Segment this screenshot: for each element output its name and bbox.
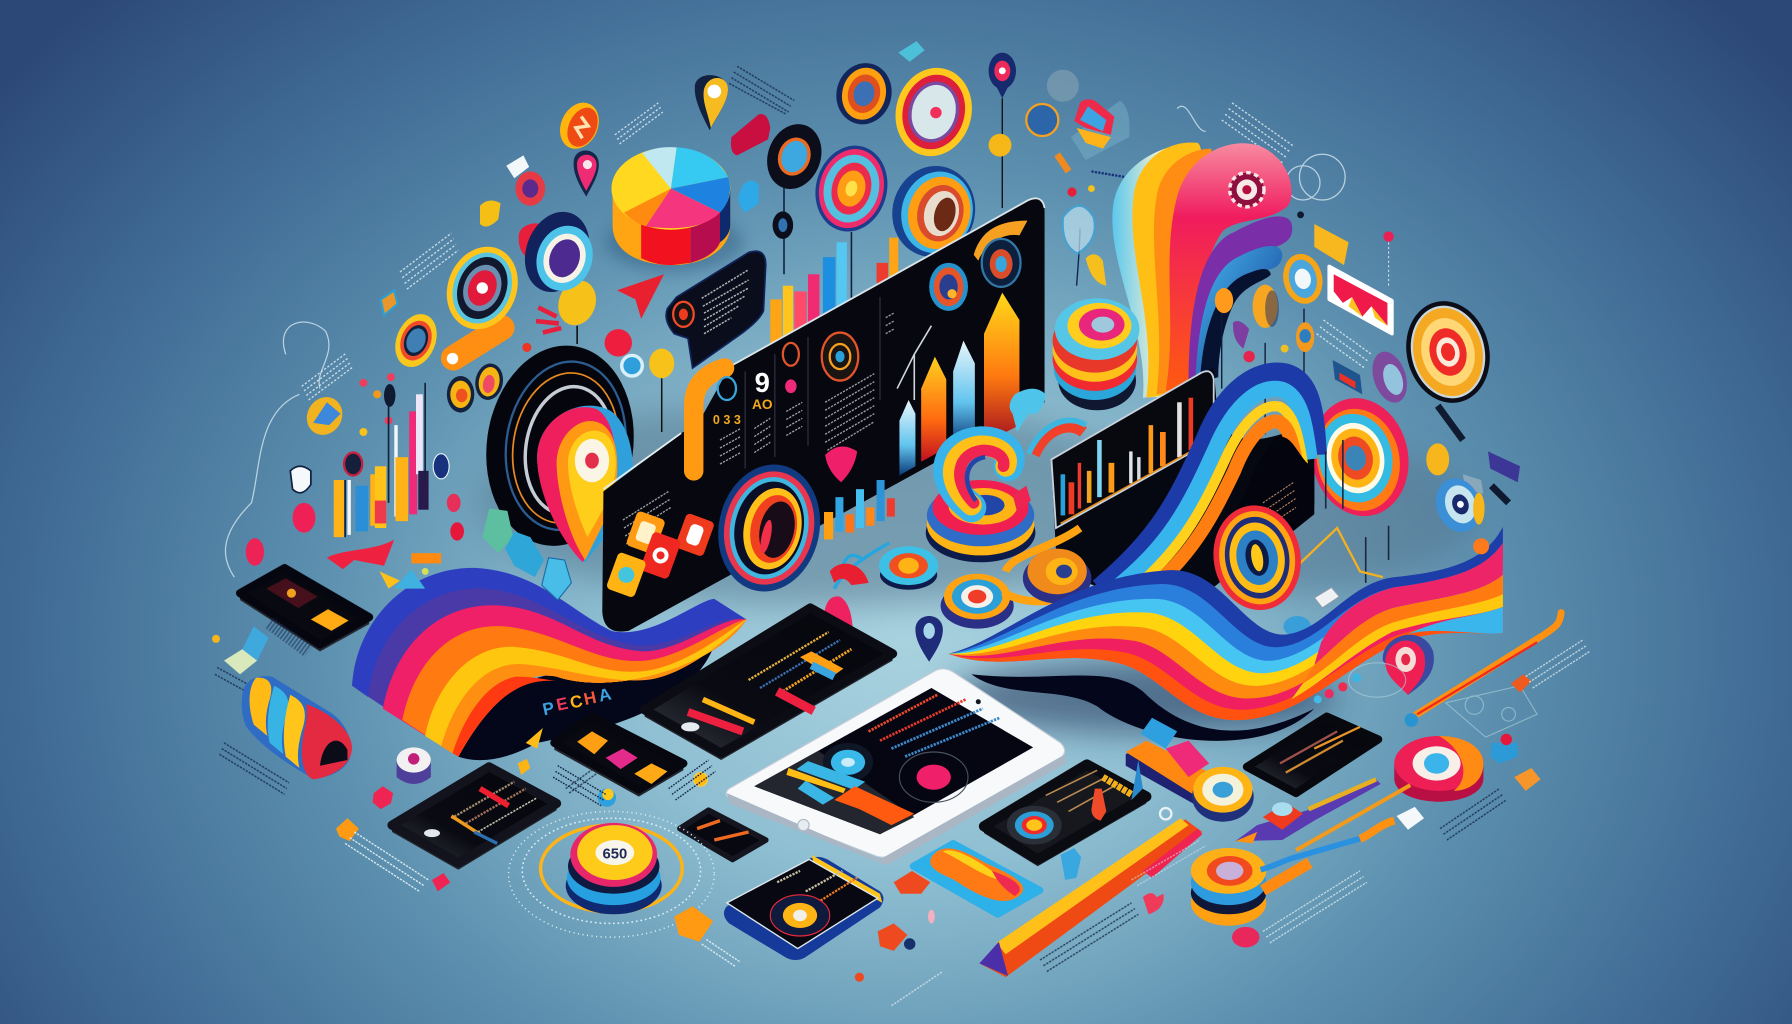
phone 4 blue bar <box>474 832 497 843</box>
navy location pin <box>915 616 943 662</box>
yellow tent chart <box>1291 528 1383 577</box>
bar stem cap <box>384 384 395 407</box>
swirl disc far right <box>1023 549 1091 603</box>
pins and balloons <box>1215 285 1314 440</box>
stack disc bottom right <box>1191 785 1424 926</box>
yellow bits <box>379 571 400 589</box>
red icon 2 <box>878 923 907 951</box>
icon: blue fish badge <box>300 391 349 441</box>
phone 6 lines <box>1046 770 1118 811</box>
icon: red dot <box>522 343 531 352</box>
icon: ring orange blue <box>1279 250 1327 307</box>
ribbon right end cyan layer <box>1408 607 1503 634</box>
pink stamp <box>1232 927 1259 947</box>
ribbon: right rainbow wave <box>949 527 1503 741</box>
pink heart pin <box>825 446 857 482</box>
swirl disc right <box>941 574 1014 629</box>
icon: yellow envelope <box>1314 224 1349 265</box>
phone home glint <box>681 722 699 731</box>
hex icons <box>482 509 513 553</box>
ribbon caption letters: C <box>568 690 584 712</box>
icon: navy dot <box>433 454 449 479</box>
panel: black under tall wave <box>1211 437 1389 583</box>
orbit dots <box>509 811 714 937</box>
icon: pink oval <box>293 503 315 533</box>
plume blue lobe <box>1195 246 1282 383</box>
tool tray organizer <box>1126 718 1254 822</box>
ring: pink orange disc <box>1301 389 1419 525</box>
icons right of plume <box>1215 211 1520 538</box>
pie chart <box>606 147 743 272</box>
small cube blue <box>1061 848 1081 880</box>
swirl side tag <box>1013 486 1031 512</box>
panel text <box>1263 482 1296 527</box>
small swirl discs center <box>824 528 1091 662</box>
pencil <box>979 818 1202 977</box>
board pink circle <box>785 379 797 393</box>
cube cluster <box>224 649 257 674</box>
small tag icon <box>1314 587 1339 608</box>
misc bottom left icons <box>336 728 930 982</box>
icon: oval orange <box>472 361 506 402</box>
light hatches lower right <box>891 640 1590 1006</box>
ring: rainbow target <box>806 137 897 240</box>
cyan pad <box>913 843 1040 914</box>
ring: swirl at wave <box>1205 498 1309 617</box>
icon: red dot pin <box>1383 231 1394 286</box>
pin red large <box>1383 635 1434 695</box>
stylus orange <box>1296 785 1410 850</box>
icon: red paper plane <box>617 274 664 319</box>
dark hatch <box>270 623 309 651</box>
red arc icon <box>830 564 869 585</box>
ribbon caption letters: A <box>597 683 613 706</box>
small icons top-left cluster <box>290 41 1016 541</box>
ring: big black target <box>1396 292 1500 412</box>
board gradient bar orange <box>921 357 946 462</box>
floor panel columns <box>1326 440 1389 583</box>
bar stems <box>345 383 425 537</box>
stack icons <box>1333 347 1413 407</box>
icon: red black dot <box>344 453 362 475</box>
orange hook <box>1360 821 1394 839</box>
dark hatches <box>553 760 715 806</box>
small chart tablet <box>1051 368 1314 617</box>
ribbon orange dot <box>1473 538 1489 554</box>
tablet blue bar <box>797 761 865 790</box>
tablet pink button <box>899 752 968 802</box>
board left icon <box>718 377 736 400</box>
board upper right ring <box>974 221 1027 287</box>
app icon pink <box>606 749 638 769</box>
swirl stack G <box>926 420 1086 562</box>
icon: black dot <box>1297 211 1304 218</box>
icon: white shield <box>290 466 311 493</box>
icon: small red <box>450 522 464 541</box>
faint diagrams right <box>1349 663 1537 737</box>
phone bars <box>688 632 851 731</box>
board bars small <box>824 480 895 539</box>
ring: purple core <box>514 203 606 303</box>
phone 4 <box>392 767 557 870</box>
tiny bottom icons <box>904 768 1541 950</box>
plume pink crest <box>1166 143 1292 391</box>
ring: yellow blue <box>388 308 444 373</box>
phone 4 red bar <box>480 789 509 806</box>
white purple pot <box>397 747 431 784</box>
light hatch <box>345 832 741 967</box>
bar chart behind board <box>770 238 898 357</box>
board line chart <box>897 326 931 400</box>
small blue tag <box>1283 616 1311 637</box>
ribbon shadow <box>458 646 714 760</box>
watch dial <box>770 895 830 936</box>
board tile icons <box>606 510 715 598</box>
icon: image card <box>1329 266 1392 334</box>
icon: red spiky marker <box>515 171 545 206</box>
speech bubble panel <box>666 251 766 368</box>
pink swirl oval <box>246 538 264 566</box>
phone 6 dial <box>1007 806 1062 845</box>
chart base line <box>1061 440 1211 523</box>
ribbon right end pink layer <box>1314 543 1503 665</box>
orange stamp <box>1514 768 1541 791</box>
cyan chat icon <box>1010 389 1046 432</box>
tablet home <box>798 819 809 831</box>
phone 6 heading <box>1103 777 1131 794</box>
icon: pink mini stack <box>359 373 395 436</box>
ribbon black shadow <box>971 674 1314 741</box>
orange block <box>674 906 713 942</box>
icon: yellow location pin <box>695 75 728 130</box>
ring: heart target <box>435 236 530 340</box>
app icon orange <box>577 731 608 754</box>
ring: yellow magnifier top <box>886 59 982 165</box>
blue swirl line <box>834 543 889 589</box>
big ring on board <box>707 455 832 601</box>
red icon <box>894 871 930 894</box>
stick blue <box>1261 837 1367 870</box>
phone small 1 <box>240 568 369 651</box>
white cap <box>1397 807 1424 830</box>
pink cube <box>432 873 450 891</box>
orange dot small <box>855 973 864 982</box>
stick orange <box>1263 863 1310 890</box>
arch roll <box>242 676 352 779</box>
swirl disc left <box>879 546 938 590</box>
icon: blue pin top <box>898 41 925 62</box>
navy dot <box>904 938 915 950</box>
swirl side arch <box>1034 427 1083 455</box>
red cylinder <box>1394 736 1483 802</box>
board gradient bar cyan <box>953 341 975 443</box>
pen tool <box>1235 779 1381 843</box>
yellow leaf <box>526 728 543 749</box>
thin outline scribbles <box>225 106 1345 577</box>
ribbon caption letters <box>541 683 613 719</box>
board spiral icon <box>822 333 858 381</box>
plume icon cluster <box>989 70 1130 197</box>
small pens <box>1091 760 1143 821</box>
tablet camera <box>976 699 981 704</box>
board gradient bar yellow <box>984 293 1019 443</box>
ribbon right end orange layer <box>1303 575 1503 683</box>
square watch device <box>724 855 883 960</box>
tablet second blue bar <box>798 781 834 805</box>
ring: black stem pin <box>773 187 851 320</box>
icon: oval duo <box>447 376 474 413</box>
phone 7 <box>1247 717 1378 793</box>
tall wave ribbon <box>1099 373 1317 609</box>
watch lines <box>777 871 857 901</box>
tablet screen <box>754 688 1033 834</box>
orange rounded tab <box>694 368 725 471</box>
ribbon: left rainbow wave <box>352 568 746 760</box>
left bar chart <box>334 383 429 537</box>
red ribbon scrap <box>327 539 394 569</box>
board column dividers <box>745 297 880 469</box>
plume purple lobe <box>1189 216 1292 383</box>
icon: blue chat tag <box>738 181 759 213</box>
cake pin <box>1086 254 1106 286</box>
tablet flame bar <box>834 786 914 825</box>
orange stick <box>1405 613 1561 727</box>
icon: orange badge <box>553 96 606 155</box>
plume emblem <box>1230 173 1264 207</box>
small block icons left <box>212 509 571 674</box>
icon: red badge <box>519 223 546 258</box>
icon: red dot 2 <box>605 329 632 357</box>
disc label: 650 <box>602 846 627 862</box>
blue yellow cube <box>598 789 616 807</box>
phone 6 <box>984 765 1146 866</box>
board gradient bar cyan small <box>899 400 915 475</box>
orange cube <box>336 818 359 841</box>
annotation dark text lines <box>215 66 1506 971</box>
panel: big black ring with pin <box>474 336 646 562</box>
small cube red <box>373 786 393 809</box>
board small heading: AO <box>752 397 773 412</box>
floor shadows <box>480 400 1474 734</box>
panel: main black dashboard board <box>602 198 1046 632</box>
tablet white <box>726 669 1065 865</box>
pale oval <box>928 910 935 923</box>
plume yellow layer <box>1132 143 1211 398</box>
orange swirl tails <box>1003 528 1086 601</box>
magnifier ring above cake <box>1063 206 1095 254</box>
bubble logo <box>673 302 694 327</box>
ribbon caption letters: H <box>582 687 598 709</box>
phone 3 small with app icons <box>554 717 683 797</box>
white ring <box>1160 808 1171 819</box>
annotation hatch lines top <box>302 103 1371 400</box>
pink pin above phone <box>824 596 853 646</box>
phone 5 tiny <box>680 810 766 859</box>
icon: white tag <box>506 155 529 178</box>
small block <box>1490 734 1518 763</box>
colored location pin <box>537 406 633 562</box>
icon: small pink <box>447 494 461 512</box>
orange dot <box>518 759 530 775</box>
cake stack <box>1053 206 1139 410</box>
icon: yellow balloon right <box>649 349 674 432</box>
tablet header lines <box>869 695 1000 757</box>
ring: black blue <box>758 116 830 197</box>
icon: navy pin top <box>989 53 1016 208</box>
icon: orange tag <box>381 290 398 315</box>
board text columns <box>623 313 894 544</box>
right misc icons <box>1426 406 1520 538</box>
phone 4 lines <box>451 782 537 832</box>
plume upper right <box>989 70 1292 398</box>
heart <box>1143 893 1164 914</box>
plume orange layer <box>1154 149 1211 394</box>
tablet blue button <box>823 743 873 782</box>
plume cyan layer <box>1112 143 1211 398</box>
ring: navy orange <box>830 57 898 131</box>
icon: pink pin <box>574 151 599 197</box>
tablet yellow bar <box>786 768 846 793</box>
ring: blue orange hole <box>882 157 985 266</box>
phone 4 orange bar <box>451 816 480 834</box>
icon: orange pill bar <box>436 310 519 375</box>
dots row <box>1314 673 1361 703</box>
yellow ring <box>694 773 707 786</box>
rings upper area <box>388 57 985 373</box>
icon: yellow marker <box>480 200 501 227</box>
board small circle icon <box>783 343 799 366</box>
phone 4 glint <box>424 829 440 837</box>
orange scrap <box>411 553 441 563</box>
ribbon right end yellow layer <box>1291 594 1503 699</box>
icon: red folder <box>731 114 770 155</box>
board second ring <box>929 263 968 311</box>
app icon yellow <box>634 763 667 784</box>
icon: cyan ring <box>622 355 642 376</box>
chart bars <box>1061 398 1193 515</box>
board numbers: 0 3 3 <box>713 413 741 427</box>
small orange tag <box>1511 674 1531 693</box>
tablet grey reflection <box>754 751 914 834</box>
disc button 650 <box>509 811 714 937</box>
board heading number nine: 9 <box>755 367 770 398</box>
plume black stem <box>1200 269 1271 383</box>
ribbon caption letters: E <box>554 693 570 715</box>
bubble text lines <box>702 270 749 334</box>
ribbon caption letters: P <box>541 697 556 719</box>
phone 2 big <box>645 608 893 760</box>
icon: yellow balloon <box>536 275 602 344</box>
